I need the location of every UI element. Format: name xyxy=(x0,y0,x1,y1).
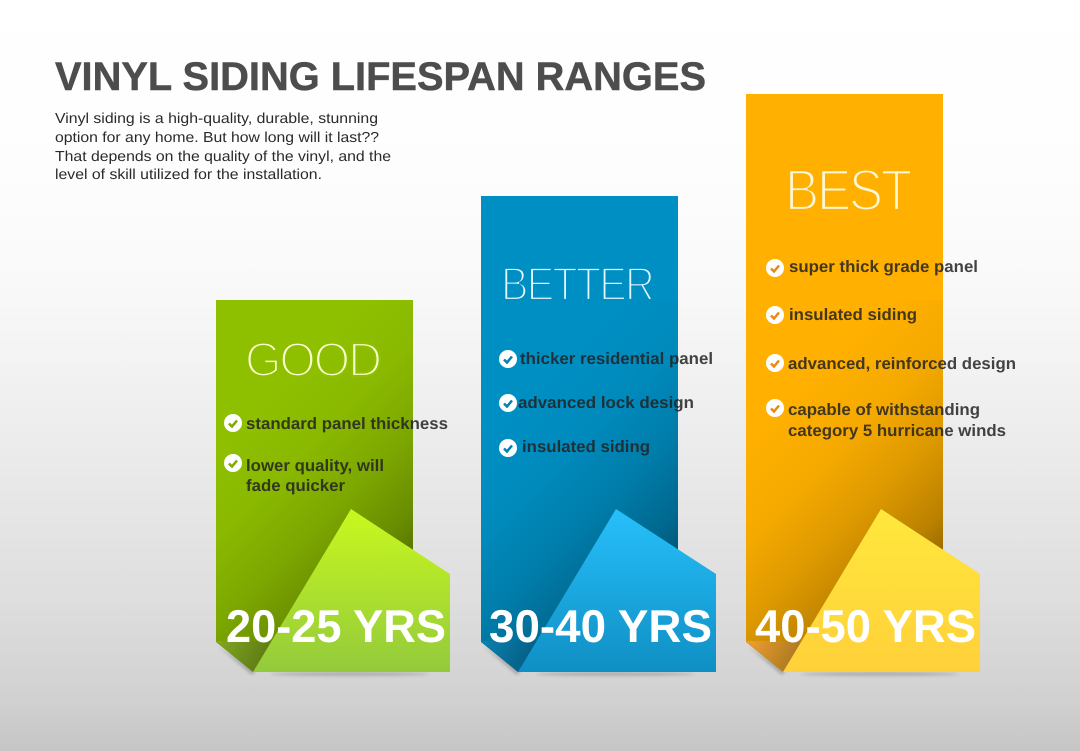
panel: good xyxy=(216,300,450,676)
floor shadow: good xyxy=(218,646,430,676)
lifespan: best: 40-50 YRS xyxy=(755,600,976,652)
feature: category 5 hurricane winds xyxy=(788,422,1006,440)
check icon xyxy=(224,454,242,472)
check icon xyxy=(766,259,784,277)
folded corner: best xyxy=(746,641,803,672)
floor shadow: better xyxy=(483,646,695,676)
intro text xyxy=(55,111,391,183)
intro text: level of skill utilized for the installation. xyxy=(55,167,322,183)
feature: thicker residential panel xyxy=(520,350,713,368)
feature: advanced lock design xyxy=(518,394,694,412)
check icon xyxy=(224,414,242,432)
shadow cast by flap: good xyxy=(216,300,413,672)
feature: capable of withstanding xyxy=(788,401,980,419)
shadow cast by flap: best xyxy=(746,300,943,672)
floor shadow: best xyxy=(748,646,960,676)
ribbon body: better xyxy=(481,196,678,672)
feature: insulated siding xyxy=(522,438,650,456)
feature xyxy=(788,401,1006,440)
panel: best xyxy=(746,94,1016,676)
feature: insulated siding xyxy=(789,306,917,324)
intro text: That depends on the quality of the vinyl, and the xyxy=(55,149,391,165)
feature: advanced, reinforced design xyxy=(788,355,1016,373)
ribbon body: good xyxy=(216,300,413,672)
feature xyxy=(246,457,384,495)
folded corner: good xyxy=(216,641,273,672)
check icon xyxy=(766,399,784,417)
shadow cast by flap: better xyxy=(481,300,678,672)
fold flap: good xyxy=(253,509,450,672)
folded corner: better xyxy=(481,641,538,672)
lifespan: good: 20-25 YRS xyxy=(226,600,446,652)
heading: best: BEST xyxy=(785,158,912,223)
title: VINYL SIDING LIFESPAN RANGES xyxy=(55,55,706,99)
check icon xyxy=(766,354,784,372)
lifespan: better: 30-40 YRS xyxy=(489,600,712,652)
feature: lower quality, will xyxy=(246,457,384,475)
fold flap: better xyxy=(518,509,716,672)
check icon xyxy=(766,306,784,324)
feature: super thick grade panel xyxy=(789,258,978,276)
fold flap: best xyxy=(783,509,980,672)
check icon xyxy=(499,394,517,412)
check icon xyxy=(499,350,517,368)
ribbon body: best xyxy=(746,94,943,672)
intro text: option for any home. But how long will it last?? xyxy=(55,130,379,146)
feature: standard panel thickness xyxy=(246,415,448,433)
intro text: Vinyl siding is a high-quality, durable, stunning xyxy=(55,111,378,127)
heading: good: GOOD xyxy=(245,334,380,387)
check icon xyxy=(499,439,517,457)
panel: better xyxy=(481,196,716,676)
feature: fade quicker xyxy=(246,477,346,495)
heading: better: BETTER xyxy=(501,257,653,310)
